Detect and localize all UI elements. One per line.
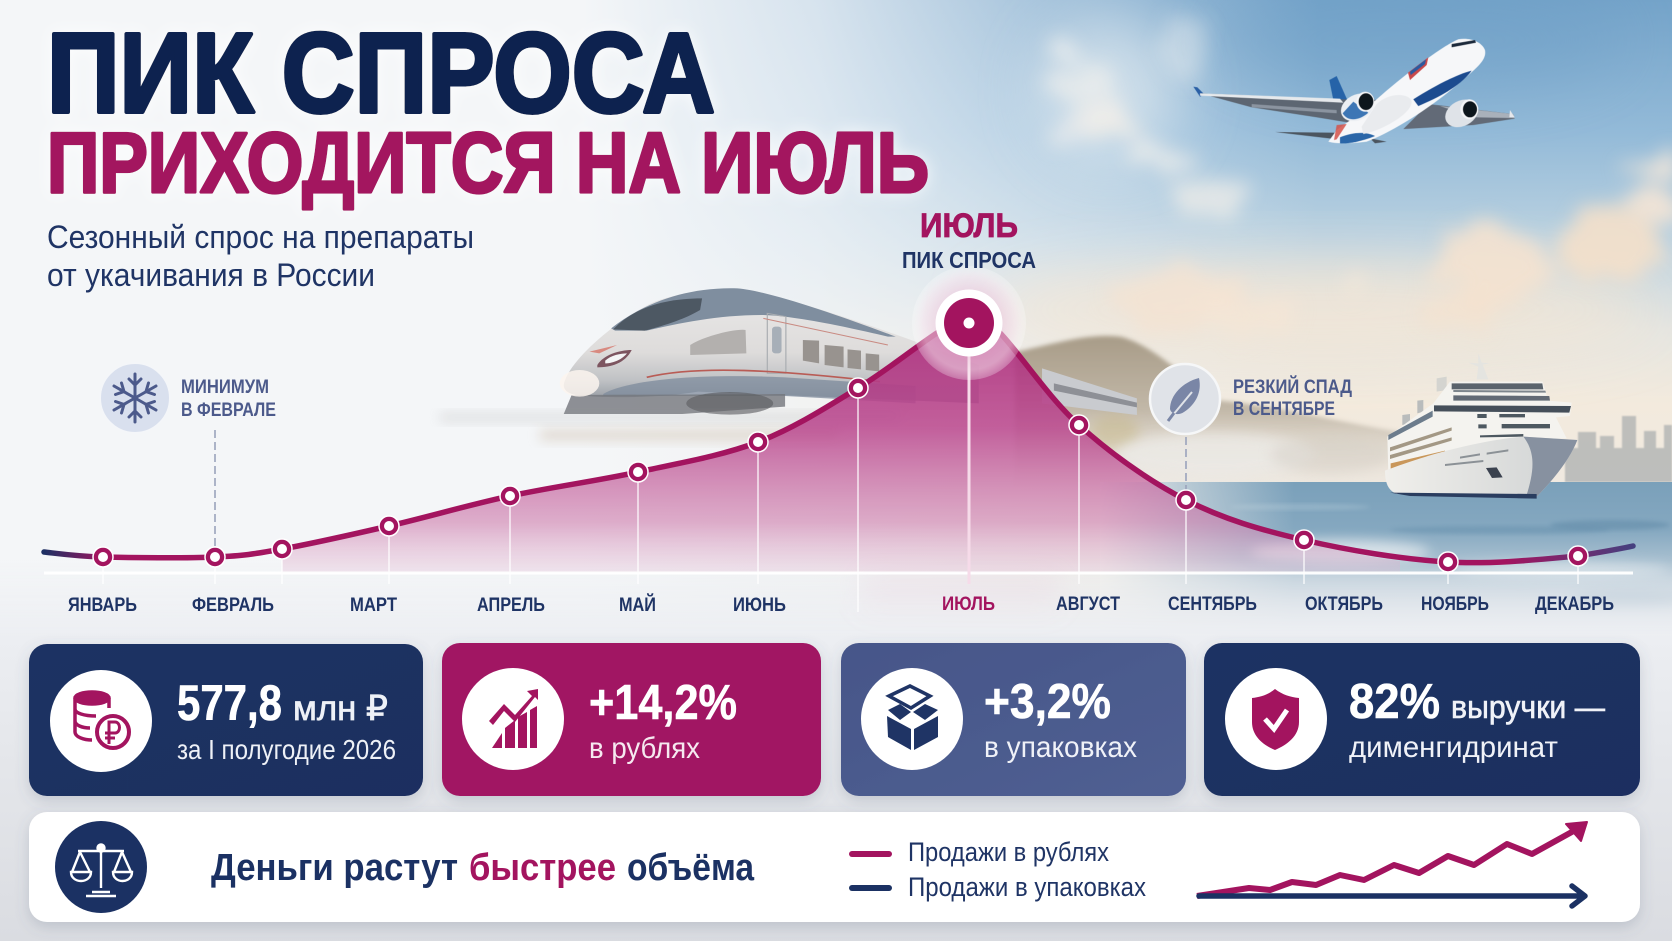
month labels: АВГУСТ	[1056, 594, 1120, 615]
mountains and coast	[1015, 336, 1400, 484]
sea	[1100, 482, 1672, 642]
month labels: ДЕКАБРЬ	[1535, 594, 1614, 615]
chart area fill	[282, 318, 1400, 573]
month labels: СЕНТЯБРЬ	[1168, 594, 1257, 615]
bottom panel headline	[211, 847, 755, 889]
airplane	[1193, 39, 1515, 143]
city skyline	[1565, 416, 1672, 482]
bottom panel headline: объёма	[627, 847, 755, 889]
icon: growth chart	[489, 689, 538, 748]
bottom panel	[29, 812, 1640, 922]
callout: February minimum	[100, 363, 276, 433]
month labels: ИЮНЬ	[733, 595, 786, 616]
card: dimenhydrinate share	[1204, 643, 1640, 796]
title	[47, 10, 929, 211]
peak marker	[912, 266, 1026, 380]
card: growth in rubles: +14,2%	[589, 676, 737, 730]
callout: September drop: В СЕНТЯБРЕ	[1233, 398, 1335, 420]
bottom panel headline: быстрее	[469, 847, 616, 889]
month labels: ОКТЯБРЬ	[1305, 594, 1383, 615]
card: growth in packages	[841, 643, 1186, 796]
month markers	[93, 378, 1588, 572]
month labels: ИЮЛЬ	[942, 594, 995, 615]
callout: September drop: РЕЗКИЙ СПАД	[1233, 374, 1352, 398]
axis baseline	[44, 572, 1633, 574]
cruise ship	[1385, 353, 1577, 499]
dashed callout connectors	[215, 430, 1186, 546]
high-speed train	[560, 288, 1137, 415]
callout: February minimum: В ФЕВРАЛЕ	[181, 399, 276, 421]
railway track mist	[440, 414, 900, 440]
card: total sales	[29, 644, 423, 796]
card: total sales: за I полугодие 2026	[177, 734, 396, 765]
demand curve line	[44, 318, 1633, 563]
clouds	[980, 20, 1672, 355]
mini chart: rubles vs packages	[1197, 822, 1587, 906]
card: dimenhydrinate share: выручки —	[1451, 689, 1605, 725]
card: growth in packages: +3,2%	[984, 675, 1111, 729]
card: dimenhydrinate share: 82%	[1349, 675, 1440, 729]
month labels: ФЕВРАЛЬ	[192, 595, 274, 616]
month labels: НОЯБРЬ	[1421, 594, 1489, 615]
icon: shield with check	[1252, 689, 1299, 750]
month labels: ЯНВАРЬ	[68, 595, 137, 616]
month labels: АПРЕЛЬ	[477, 595, 545, 616]
legend	[849, 837, 1146, 902]
legend: Продажи в упаковках	[908, 872, 1146, 902]
bottom backdrop	[0, 560, 1672, 941]
callout: September drop	[1150, 364, 1352, 434]
icon: leaf	[1168, 378, 1200, 421]
bottom panel headline: Деньги растут	[211, 847, 458, 889]
title: ПИК СПРОСА	[47, 10, 715, 136]
legend: Продажи в рублях	[908, 837, 1109, 867]
month labels: МАЙ	[619, 594, 656, 616]
month labels: МАРТ	[350, 595, 397, 616]
peak label: ИЮЛЬ	[920, 207, 1018, 245]
subtitle: Сезонный спрос на препараты	[47, 219, 474, 255]
icon: coins with ruble	[75, 692, 129, 748]
card: total sales: 577,8	[177, 675, 282, 731]
callout: February minimum: МИНИМУМ	[181, 376, 269, 398]
card: growth in rubles	[442, 643, 821, 796]
title: ПРИХОДИТСЯ НА ИЮЛЬ	[47, 116, 929, 211]
card: growth in rubles: в рублях	[589, 732, 700, 765]
chart: seasonal demand curve	[44, 266, 1633, 618]
subtitle: от укачивания в России	[47, 257, 375, 293]
month labels	[68, 594, 1614, 616]
peak label	[902, 207, 1036, 273]
subtitle	[47, 219, 474, 293]
month drop lines	[103, 397, 1578, 612]
icon: snowflake	[114, 374, 156, 422]
icon: scales	[55, 821, 147, 913]
icon: open box	[887, 686, 938, 750]
card: growth in packages: в упаковках	[984, 731, 1137, 764]
card: dimenhydrinate share: дименгидринат	[1349, 731, 1558, 764]
peak label: ПИК СПРОСА	[902, 247, 1036, 273]
card: total sales: млн ₽	[293, 689, 388, 728]
